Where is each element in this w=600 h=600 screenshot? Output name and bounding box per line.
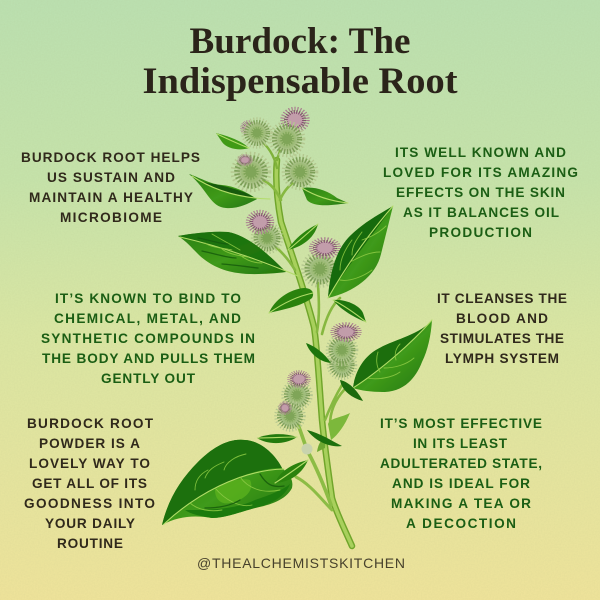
- text: microbiome: US SUSTAIN AND: [47, 170, 175, 185]
- leaf: small mid: [288, 224, 318, 250]
- text: powder: BURDOCK ROOT: [27, 416, 154, 431]
- text: blood and lymph: IT CLEANSES THE: [437, 291, 567, 306]
- leaf: pale small: [317, 413, 350, 452]
- text: tea or decoction: MAKING A TEA OR: [391, 496, 531, 511]
- seed heads: [234, 109, 359, 455]
- text: microbiome: [21, 150, 200, 225]
- text: binding compounds: THE BODY AND PULLS THEM: [42, 351, 255, 366]
- text: powder: LOVELY WAY TO: [29, 456, 150, 471]
- leaf: large left: [178, 232, 298, 276]
- text: tea or decoction: A DECOCTION: [406, 516, 516, 531]
- text: blood and lymph: STIMULATES THE: [440, 331, 564, 346]
- title: [142, 21, 458, 102]
- text: tea or decoction: ADULTERATED STATE,: [380, 456, 542, 471]
- leaf: mid narrow: [306, 343, 331, 363]
- text: blood and lymph: [437, 291, 567, 366]
- text: tea or decoction: [380, 416, 542, 531]
- text: skin: PRODUCTION: [429, 225, 532, 240]
- footer handle: @THEALCHEMISTSKITCHEN: [197, 555, 405, 571]
- text: binding compounds: GENTLY OUT: [101, 371, 196, 386]
- title: Indispensable Root: [142, 61, 458, 102]
- leaf: upper right: [302, 188, 348, 205]
- text: binding compounds: [41, 291, 255, 386]
- text: powder: POWDER IS A: [39, 436, 140, 451]
- text: microbiome: MAINTAIN A HEALTHY: [29, 190, 193, 205]
- leaf: large right: [328, 206, 393, 298]
- leaf: small at junction: [275, 460, 308, 483]
- text: blood and lymph: BLOOD AND: [456, 311, 548, 326]
- leaf: large bottom: [162, 440, 292, 525]
- text: blood and lymph: LYMPH SYSTEM: [445, 351, 559, 366]
- text: microbiome: BURDOCK ROOT HELPS: [21, 150, 200, 165]
- illustration: burdock plant: [162, 109, 432, 546]
- text: binding compounds: CHEMICAL, METAL, AND: [54, 311, 241, 326]
- text: powder: GOODNESS INTO: [24, 496, 155, 511]
- text: binding compounds: SYNTHETIC COMPOUNDS IN: [41, 331, 255, 346]
- leaf: top small left: [216, 133, 249, 149]
- text: tea or decoction: IT’S MOST EFFECTIVE: [380, 416, 542, 431]
- text: skin: EFFECTS ON THE SKIN: [396, 185, 565, 200]
- text: skin: AS IT BALANCES OIL: [403, 205, 559, 220]
- leaf: lower small: [340, 380, 363, 401]
- leaf: upper left: [189, 174, 270, 208]
- leaf: narrow left of stem: [257, 434, 297, 443]
- leaf: narrow right of stem: [307, 430, 342, 446]
- text: skin: ITS WELL KNOWN AND: [395, 145, 566, 160]
- plant stems: [256, 138, 352, 546]
- text: powder: ROUTINE: [57, 536, 123, 551]
- title: Burdock: The: [190, 21, 410, 62]
- text: tea or decoction: AND IS IDEAL FOR: [392, 476, 530, 491]
- text: microbiome: MICROBIOME: [60, 210, 162, 225]
- leaf: stem right: [333, 300, 366, 322]
- leaf: lower right: [353, 320, 432, 392]
- text: skin: LOVED FOR ITS AMAZING: [383, 165, 578, 180]
- text: powder: YOUR DAILY: [45, 516, 135, 531]
- text: powder: GET ALL OF ITS: [32, 476, 147, 491]
- text: skin: [383, 145, 578, 240]
- leaf: stem left: [269, 288, 313, 313]
- text: binding compounds: IT’S KNOWN TO BIND TO: [55, 291, 241, 306]
- text: powder: [24, 416, 155, 551]
- text: tea or decoction: IN ITS LEAST: [413, 436, 508, 451]
